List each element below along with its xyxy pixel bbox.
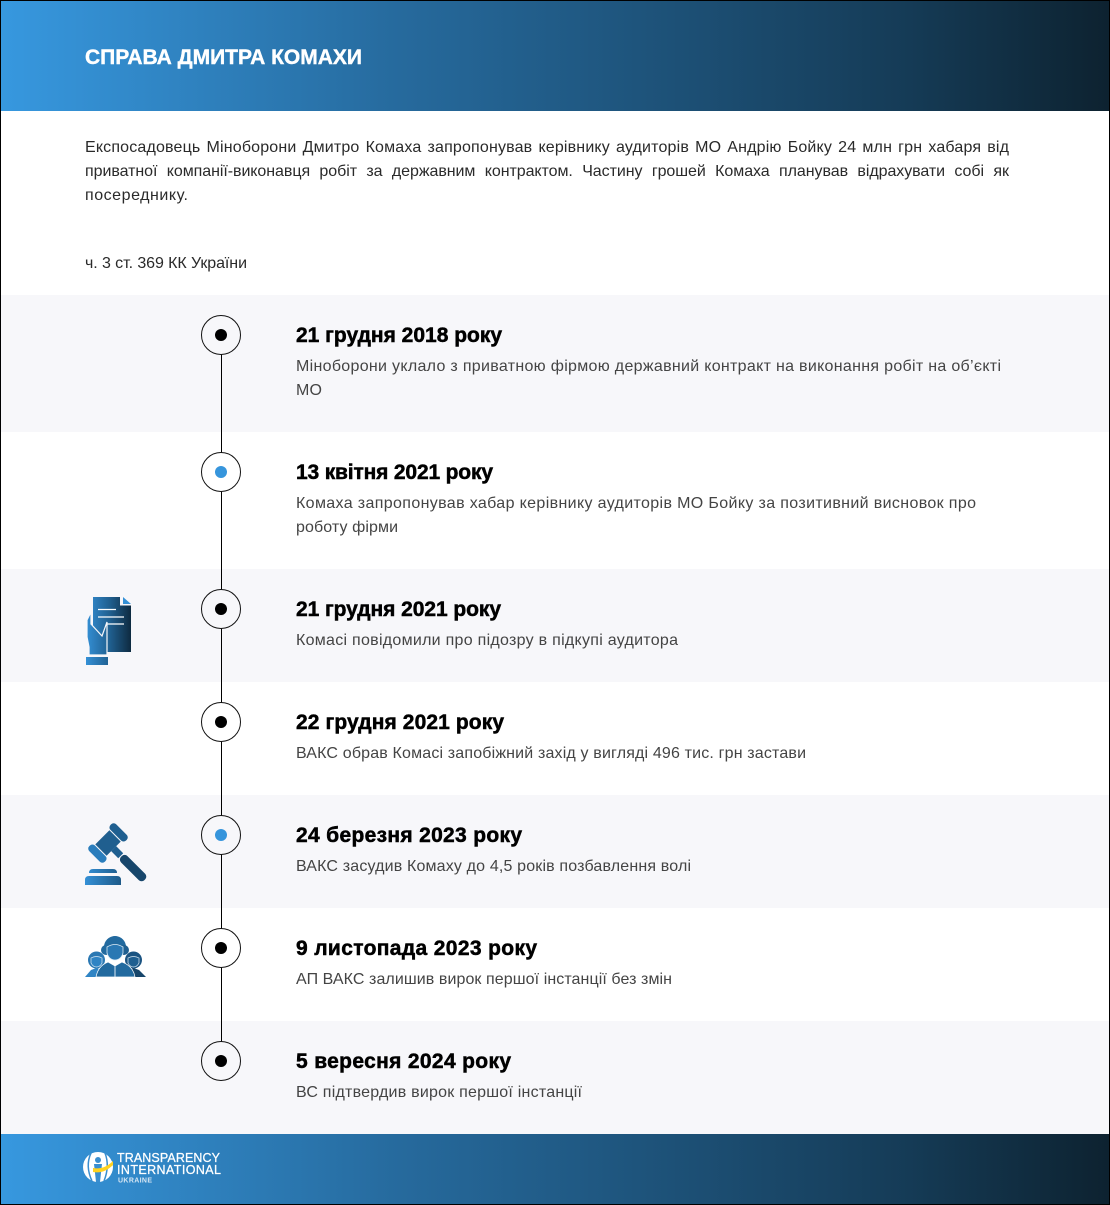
event 7: ВС підтвердив вирок першої інстанції xyxy=(296,1084,583,1101)
intro paragraph: Експосадовець Міноборони Дмитро Комаха запропонував керівнику аудиторів МО Андрію Бойку 24 млн грн хабаря від xyxy=(85,139,1010,156)
event 1: Міноборони уклало з приватною фірмою державний контракт на виконання робіт на об’єкті xyxy=(296,358,1001,375)
event 1: 21 грудня 2018 року xyxy=(296,324,502,347)
event 6: АП ВАКС залишив вирок першої інстанції без змін xyxy=(296,971,672,988)
event 5: ВАКС засудив Комаху до 4,5 років позбавлення волі xyxy=(296,858,691,875)
timeline row backgrounds xyxy=(1,295,1109,1134)
intro paragraph xyxy=(85,139,1010,204)
event 5 xyxy=(202,816,691,875)
logo: Transparency International Ukraine: UKRAINE xyxy=(118,1178,152,1184)
footer banner xyxy=(1,1134,1109,1204)
event 6 xyxy=(202,928,672,988)
event 7: 5 вересня 2024 року xyxy=(296,1050,511,1073)
logo: Transparency International Ukraine xyxy=(83,1151,221,1184)
event 6: 9 листопада 2023 року xyxy=(296,937,537,960)
event 5: 24 березня 2023 року xyxy=(296,824,522,847)
event 1: МО xyxy=(296,382,322,399)
event 4: 22 грудня 2021 року xyxy=(296,711,504,734)
intro paragraph: приватної компанії-виконавця робіт за державним контрактом. Частину грошей Комаха планував відрахувати собі як xyxy=(85,163,1010,180)
event 3 xyxy=(202,590,678,649)
event 4 xyxy=(202,702,806,762)
legal article: ч. 3 ст. 369 КК України xyxy=(85,255,247,272)
icon: group of people xyxy=(85,936,146,977)
icon: gavel xyxy=(85,822,158,893)
icon: hand holding document xyxy=(86,597,131,665)
event 3: Комасі повідомили про підозру в підкупі аудитора xyxy=(296,632,678,649)
event 2 xyxy=(202,452,976,536)
event 4: ВАКС обрав Комасі запобіжний захід у вигляді 496 тис. грн застави xyxy=(296,745,806,762)
intro paragraph: посереднику. xyxy=(85,187,188,204)
logo: Transparency International Ukraine: INTERNATIONAL xyxy=(117,1163,221,1177)
event 2: роботу фірми xyxy=(296,519,398,536)
event 2: Комаха запропонував хабар керівнику аудиторів МО Бойку за позитивний висновок про xyxy=(296,495,976,512)
event 7 xyxy=(202,1042,583,1101)
event 2: 13 квітня 2021 року xyxy=(296,461,493,484)
timeline axis xyxy=(220,335,222,1061)
event 3: 21 грудня 2021 року xyxy=(296,598,501,621)
header banner xyxy=(1,1,1109,111)
event 1 xyxy=(202,316,1001,399)
logo: Transparency International Ukraine: TRANSPARENCY xyxy=(117,1151,221,1165)
title: СПРАВА ДМИТРА КОМАХИ xyxy=(85,46,362,69)
